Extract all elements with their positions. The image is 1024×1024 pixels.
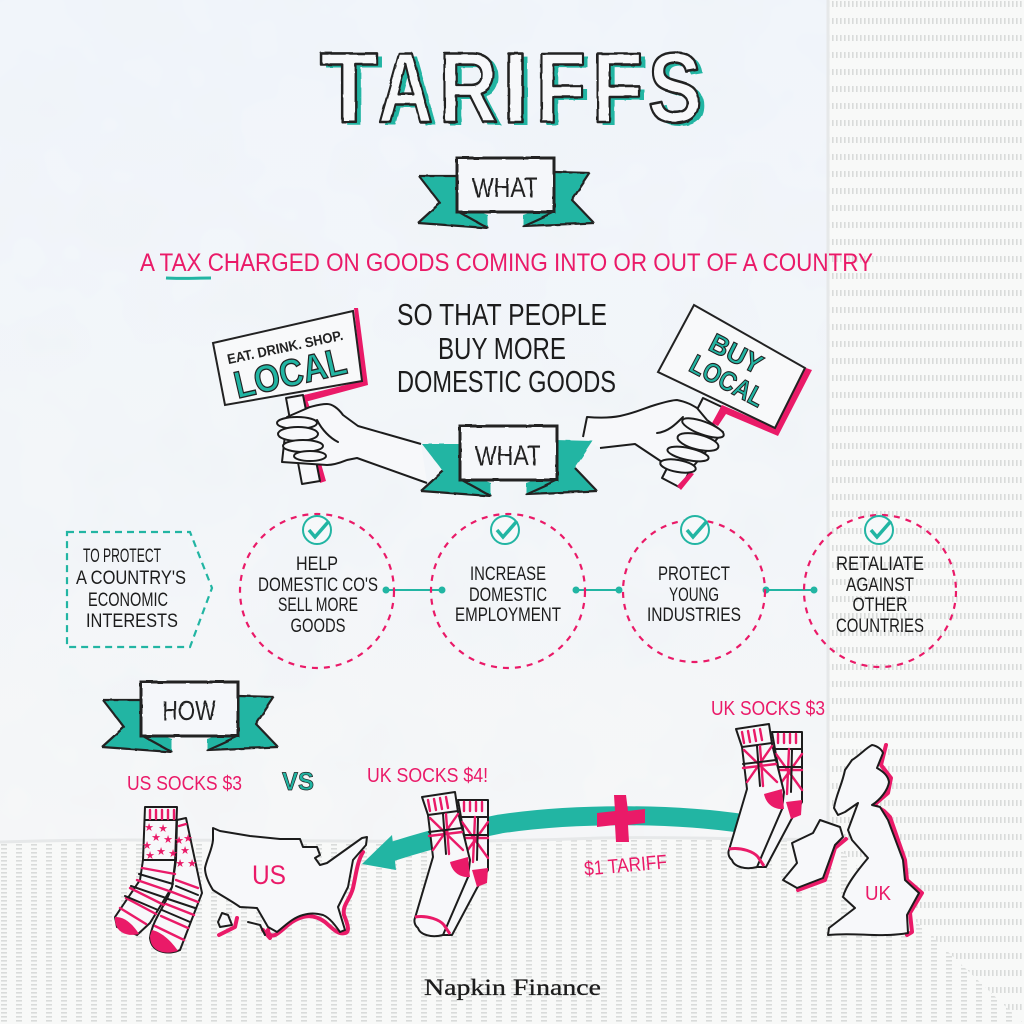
stars: ★ bbox=[145, 850, 155, 862]
circle: help domestic companies: HELP bbox=[296, 554, 338, 575]
circle: protect young industries: INDUSTRIES bbox=[647, 605, 741, 626]
label: uk socks $4: UK SOCKS $4! bbox=[367, 765, 488, 787]
circle: increase domestic employment: EMPLOYMENT bbox=[455, 605, 561, 626]
right hand holding sign bbox=[583, 305, 812, 490]
map: us bbox=[205, 828, 367, 938]
icon: check bbox=[865, 516, 893, 544]
right sign stick bbox=[662, 398, 722, 488]
callout: to protect a country's economic interests: ECONOMIC bbox=[88, 589, 168, 611]
banner: what (second) bbox=[421, 426, 597, 496]
label: tariff: $1 TARIFF bbox=[583, 851, 668, 881]
stars: ★ bbox=[151, 832, 161, 844]
circle: help domestic companies bbox=[240, 514, 394, 668]
left hand holding sign bbox=[213, 308, 427, 484]
title letters: F bbox=[536, 32, 586, 143]
right sign shadow bbox=[677, 368, 812, 490]
label: vs: VS bbox=[282, 768, 314, 796]
right hand and arm bbox=[583, 400, 723, 470]
brand: napkin finance: Napkin Finance bbox=[424, 975, 601, 1000]
circle: help domestic companies: DOMESTIC CO'S bbox=[258, 575, 378, 596]
left sign text: EAT. DRINK. SHOP. bbox=[226, 327, 344, 367]
stars: ★ bbox=[158, 823, 168, 835]
title shadow: R bbox=[444, 35, 503, 146]
circle: increase domestic employment: INCREASE bbox=[470, 564, 546, 585]
left sign text: LOCAL bbox=[230, 341, 351, 407]
left sock bbox=[414, 792, 470, 936]
label: uk socks $3: UK SOCKS $3 bbox=[711, 698, 825, 720]
icon: check bbox=[303, 516, 331, 544]
label: us socks: US SOCKS $3 bbox=[127, 773, 242, 795]
icon: uk socks $3 bbox=[728, 724, 802, 868]
text: so that people buy more domestic goods: SO THAT PEOPLE bbox=[397, 297, 607, 332]
text: so that people buy more domestic goods: DOMESTIC GOODS bbox=[397, 364, 616, 399]
callout: to protect a country's economic interests: INTERESTS bbox=[86, 610, 178, 632]
title shadow: F bbox=[597, 35, 648, 146]
stars bbox=[142, 822, 197, 870]
circle: retaliate against other countries: AGAINST bbox=[846, 575, 914, 596]
circle: retaliate against other countries: COUNTRIES bbox=[836, 616, 924, 637]
stars: ★ bbox=[168, 848, 178, 860]
circle: protect young industries bbox=[623, 516, 765, 662]
stars: ★ bbox=[187, 858, 197, 870]
left sign shadow bbox=[304, 308, 368, 483]
stars: ★ bbox=[156, 846, 166, 858]
connector lines bbox=[384, 588, 816, 592]
stars: ★ bbox=[175, 858, 185, 870]
banner: what bbox=[418, 158, 594, 228]
map: uk: UK bbox=[865, 883, 892, 905]
title letters: R bbox=[439, 32, 498, 143]
title letters: A bbox=[378, 32, 433, 143]
icon: plus tariff bbox=[597, 795, 645, 842]
icon: check bbox=[491, 516, 519, 544]
stars: ★ bbox=[183, 833, 193, 845]
title shadow: A bbox=[383, 35, 438, 146]
right sign bbox=[658, 305, 805, 428]
right sign text bbox=[685, 328, 769, 413]
left sock bbox=[115, 807, 177, 935]
title shadow: I bbox=[507, 35, 534, 146]
stars: ★ bbox=[180, 845, 190, 857]
circle: protect young industries: PROTECT bbox=[658, 564, 730, 585]
title letters: T bbox=[320, 32, 378, 143]
banner: what: WHAT bbox=[472, 172, 538, 203]
banner: how bbox=[102, 682, 278, 752]
right sock bbox=[150, 818, 202, 952]
circle: help domestic companies: GOODS bbox=[290, 616, 346, 637]
title letters: F bbox=[592, 32, 643, 143]
circle: retaliate against other countries: RETALIATE bbox=[836, 554, 924, 575]
circle: increase domestic employment: DOMESTIC bbox=[469, 585, 547, 606]
title letters: S bbox=[648, 32, 702, 143]
circle: help domestic companies: SELL MORE bbox=[278, 595, 358, 616]
left hand and arm bbox=[282, 404, 427, 483]
subtitle: definition: A TAX CHARGED ON GOODS COMING INTO OR OUT OF A COUNTRY bbox=[140, 249, 873, 277]
stars: ★ bbox=[144, 822, 154, 834]
text: so that people buy more domestic goods bbox=[397, 297, 616, 399]
map: us: US bbox=[252, 860, 286, 890]
banner: what (second): WHAT bbox=[475, 440, 541, 471]
left sign bbox=[213, 311, 362, 405]
circle: protect young industries: YOUNG bbox=[669, 585, 719, 606]
stars: ★ bbox=[163, 834, 173, 846]
left sign stick bbox=[286, 395, 320, 484]
map: uk bbox=[783, 745, 922, 935]
icon: uk socks $4 bbox=[414, 792, 488, 936]
title letters bbox=[320, 32, 702, 143]
title shadow: F bbox=[541, 35, 591, 146]
stars: ★ bbox=[142, 840, 152, 852]
right sign text: LOCAL bbox=[685, 349, 769, 413]
callout: to protect a country's economic interests: TO PROTECT bbox=[83, 545, 161, 567]
title shadow: T bbox=[325, 35, 383, 146]
right sign text: BUY bbox=[704, 328, 768, 380]
circle: retaliate against other countries bbox=[804, 515, 956, 667]
text: so that people buy more domestic goods: BUY MORE bbox=[438, 331, 566, 366]
icon: us socks bbox=[115, 807, 202, 953]
arrow: uk to us bbox=[362, 816, 745, 870]
right sock bbox=[442, 800, 488, 935]
banner: how: HOW bbox=[162, 695, 216, 726]
stars: ★ bbox=[174, 835, 184, 847]
callout: to protect a country's economic interests: A COUNTRY'S bbox=[76, 567, 186, 589]
callout: to protect a country's economic interests bbox=[67, 532, 212, 647]
title shadow: S bbox=[653, 35, 707, 146]
circle: increase domestic employment bbox=[431, 514, 585, 668]
title shadow bbox=[325, 35, 707, 146]
title letters: I bbox=[502, 32, 529, 143]
circle: retaliate against other countries: OTHER bbox=[852, 595, 908, 616]
title bbox=[320, 32, 707, 146]
icon: check bbox=[681, 516, 709, 544]
